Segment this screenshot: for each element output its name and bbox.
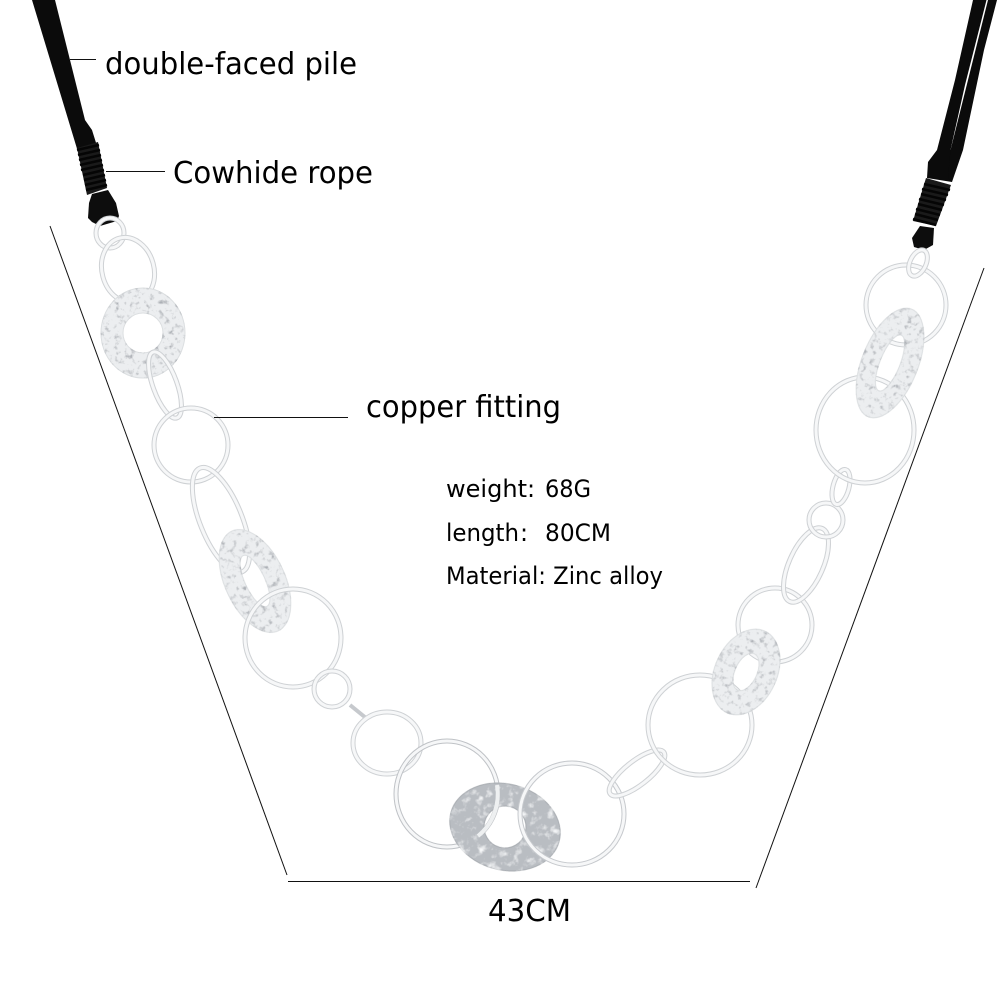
chain: left side (94, 218, 421, 774)
large ring left (245, 589, 341, 687)
oval link right (774, 522, 838, 608)
specs text block: Material: Zinc alloy (446, 562, 663, 590)
chain: centre (396, 741, 671, 883)
specs text block: : (520, 519, 528, 547)
small oval right (829, 468, 853, 506)
small ring right (809, 503, 843, 537)
hammered washer upper left (101, 288, 185, 378)
hammered oval washer right (842, 299, 938, 427)
ring lower right (648, 675, 752, 775)
large ring upper right (816, 377, 914, 483)
ring upper left (94, 231, 162, 309)
oval link (142, 348, 188, 422)
specs text block: length (446, 519, 519, 547)
link ring top left (96, 218, 124, 248)
left dimension line (50, 226, 287, 875)
small connector bar (350, 705, 366, 718)
right black cord (912, 0, 997, 250)
ring with copper fitting (154, 408, 228, 482)
large hammered washer (440, 771, 570, 883)
ring top right (866, 265, 946, 345)
ring centre left (396, 741, 498, 847)
specs text block: : (527, 475, 535, 503)
ring lower left (353, 712, 421, 774)
specs text block: 68G (545, 475, 591, 503)
right dimension line (756, 268, 984, 888)
specs text block: 80CM (545, 519, 611, 547)
long oval left (181, 460, 261, 580)
specs text block (446, 475, 663, 590)
small link top right (905, 247, 931, 279)
label: double-faced pile: double-faced pile (105, 47, 357, 82)
label: Cowhide rope: Cowhide rope (173, 156, 373, 191)
label: copper fitting: copper fitting (366, 390, 561, 425)
chain: right side (648, 247, 946, 775)
ring centre right (520, 763, 624, 865)
oval link centre right (603, 743, 671, 803)
ring right (738, 588, 812, 662)
centre ring over washer (478, 785, 498, 836)
hammered oval washer left (205, 518, 305, 644)
hammered washer lower right (699, 618, 793, 726)
left black cord (32, 0, 119, 226)
specs text block: weight (446, 475, 527, 503)
small ring (314, 671, 350, 707)
bottom dimension line (288, 880, 750, 882)
width measurement: 43CM: 43CM (488, 894, 571, 929)
